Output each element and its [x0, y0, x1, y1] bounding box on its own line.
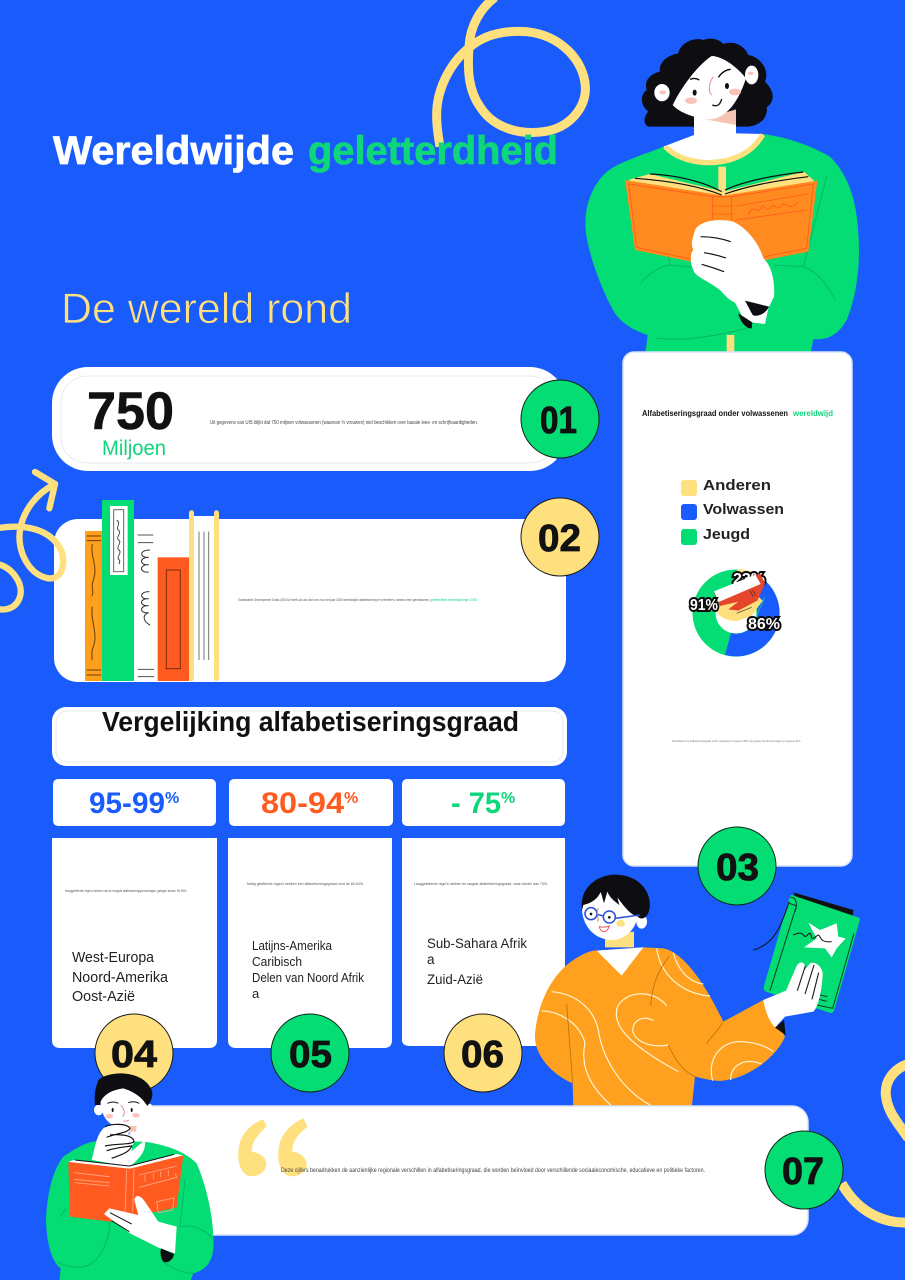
- region list: a: [427, 952, 435, 967]
- description: Matig geletterde regio's hebben een alfabetiseringsgraad rond de 80-94%.: [247, 882, 364, 886]
- stat box: 95-99%: [53, 779, 216, 826]
- description: Hooggeletterde regio's hebben ook de hoogste alfabetiseringspercentages, gelegen tussen 95-99%.: [65, 889, 187, 893]
- woman sleeve lines: [641, 177, 835, 339]
- badge 06: [444, 1014, 522, 1092]
- stat box: 75%: %: [501, 790, 515, 807]
- donut value labels: [690, 597, 780, 633]
- panel 05: moderate literacy regions: [228, 838, 392, 1048]
- man reading hand: [104, 1196, 177, 1262]
- stat box: 75%: [402, 779, 565, 826]
- region list: Caribisch: [252, 954, 302, 969]
- badge 01: [521, 380, 599, 458]
- donut value labels: 86%: [748, 616, 780, 633]
- legend: Anderen: [703, 477, 771, 494]
- badge 05: 05: [289, 1034, 332, 1076]
- cream book: [189, 510, 219, 681]
- badge 02: [521, 498, 599, 576]
- panel 02: SDG card: [54, 519, 566, 682]
- badge 06: 06: [461, 1034, 504, 1076]
- donut chart: 23%: [733, 571, 765, 588]
- man sleeve lines: [58, 1180, 214, 1273]
- region list: a: [252, 986, 260, 1001]
- man body: [46, 1142, 214, 1280]
- sweater folds: [567, 957, 723, 1083]
- stat box: 95-99%: 95-99: [89, 787, 165, 820]
- description: Laaggeletterde regio's hebben de laagste alfabetiseringsgraad, vaak minder dan 75%.: [414, 882, 548, 886]
- region list: Zuid-Azië: [427, 972, 483, 987]
- woman eyes and mouth: [690, 69, 731, 106]
- region list: Latijns-Amerika: [252, 938, 333, 953]
- decorative arrow doodle: [0, 472, 63, 610]
- quote marks: [238, 1118, 308, 1176]
- woman body: [585, 134, 859, 357]
- legend: Volwassen: [703, 501, 784, 518]
- description: Sustainable Development Goals (SDGs) heeft ook als doel om voor het jaar 2030 wereldwijde alfabetisering te verbeteren, steeds meer gerealiseerd, geletterdheid wereldwijd tegen 2030: [238, 598, 477, 602]
- orange book: [85, 531, 102, 681]
- chart title: Alfabetiseringsgraad onder volwassenen: [642, 409, 788, 418]
- badge 02: 02: [538, 518, 581, 560]
- description: Uit gegevens van UIS blijkt dat 750 miljoen volwassenen (waarvan ⅔ vrouwen) niet beschikken over basale lees- en schrijfvaardigheden.: [210, 420, 478, 426]
- heading: vergelijking: Vergelijking alfabetiseringsgraad: [102, 706, 519, 737]
- man head: [94, 1073, 153, 1132]
- region list: Delen van Noord Afrik: [252, 970, 364, 985]
- illustration: man in orange sweater: [535, 875, 860, 1108]
- white book: [134, 520, 158, 681]
- region list: Oost-Azië: [72, 989, 135, 1005]
- subtitle: De wereld rond: [61, 285, 352, 333]
- panel 06: low literacy regions: [402, 838, 565, 1046]
- donut value labels: 91%: [690, 597, 718, 614]
- woman neck: [663, 113, 763, 160]
- badge 07: 07: [782, 1151, 824, 1193]
- sweater pattern: [542, 948, 773, 1106]
- region list: Noord-Amerika: [72, 970, 169, 986]
- illustration: woman reading: [585, 39, 859, 357]
- green book held up: [753, 892, 860, 1013]
- badge 07: [765, 1131, 843, 1209]
- stat box: 80-94%: %: [344, 790, 358, 807]
- man book: [68, 1154, 183, 1222]
- legend: Jeugd: [703, 526, 750, 543]
- decorative swirl: top: [437, 0, 585, 147]
- panel 01: 750 miljoen: [52, 367, 566, 471]
- badge 03: 03: [716, 847, 759, 889]
- panel 03: adult literacy chart: [623, 352, 852, 866]
- man body: [535, 947, 785, 1108]
- region list: West-Europa: [72, 950, 155, 966]
- badge 04: 04: [111, 1034, 157, 1076]
- woman hand: [691, 220, 774, 328]
- red book: [158, 557, 189, 681]
- illustration: man reading in green: [46, 1073, 214, 1280]
- stat box: 80-94%: [229, 779, 393, 826]
- statement text: Deze cijfers benadrukken de aanzienlijke regionale verschillen in alfabetiseringsgraad, die worden beïnvloed door verschillende sociaaleconomische, educatieve en politieke factoren.: [281, 1167, 705, 1174]
- title: [53, 129, 558, 173]
- region list: [252, 938, 364, 1001]
- region list: [427, 936, 527, 987]
- woman ears: [654, 66, 758, 101]
- man hand at chin: [92, 1124, 145, 1167]
- stat box: 80-94%: 80-94: [261, 787, 344, 820]
- small hand and book on chart: [714, 573, 765, 621]
- woman collar: [665, 135, 763, 163]
- badge 03: [698, 827, 776, 905]
- decorative swirl: bottom right: [842, 1063, 905, 1223]
- woman hair: [642, 39, 773, 127]
- donut chart: [704, 569, 780, 656]
- stat box: 75%: - 75: [451, 787, 501, 820]
- title: Wereldwijde: [53, 129, 294, 173]
- badge 05: [271, 1014, 349, 1092]
- legend: [681, 477, 784, 545]
- badge 01: 01: [540, 400, 577, 442]
- man neck: [597, 947, 643, 976]
- panel 04: high literacy regions: [52, 838, 217, 1048]
- man head: [582, 875, 650, 940]
- heading: vergelijking: [52, 706, 567, 766]
- miljoen label: Miljoen: [102, 437, 166, 460]
- chart title: wereldwijd: [792, 409, 833, 418]
- green book: [102, 500, 134, 681]
- region list: Sub-Sahara Afrik: [427, 936, 527, 951]
- man hand: [763, 962, 823, 1035]
- illustration: books: [85, 500, 219, 681]
- woman book: [625, 172, 817, 268]
- woman face: [673, 56, 746, 119]
- title: geletterdheid: [308, 129, 558, 173]
- woman cheeks: [659, 72, 754, 104]
- panel 07: closing statement: [130, 1106, 808, 1235]
- chart footnote: Wereldwijd is de alfabetiseringsgraad onder volwassenen ongeveer 86%, bij jongeren ligt dit percentage op ongeveer 91%.: [672, 739, 801, 743]
- region list: [72, 950, 169, 1005]
- stat box: 95-99%: %: [165, 790, 179, 807]
- big number: 750: [87, 382, 174, 441]
- badge 04: [95, 1014, 173, 1092]
